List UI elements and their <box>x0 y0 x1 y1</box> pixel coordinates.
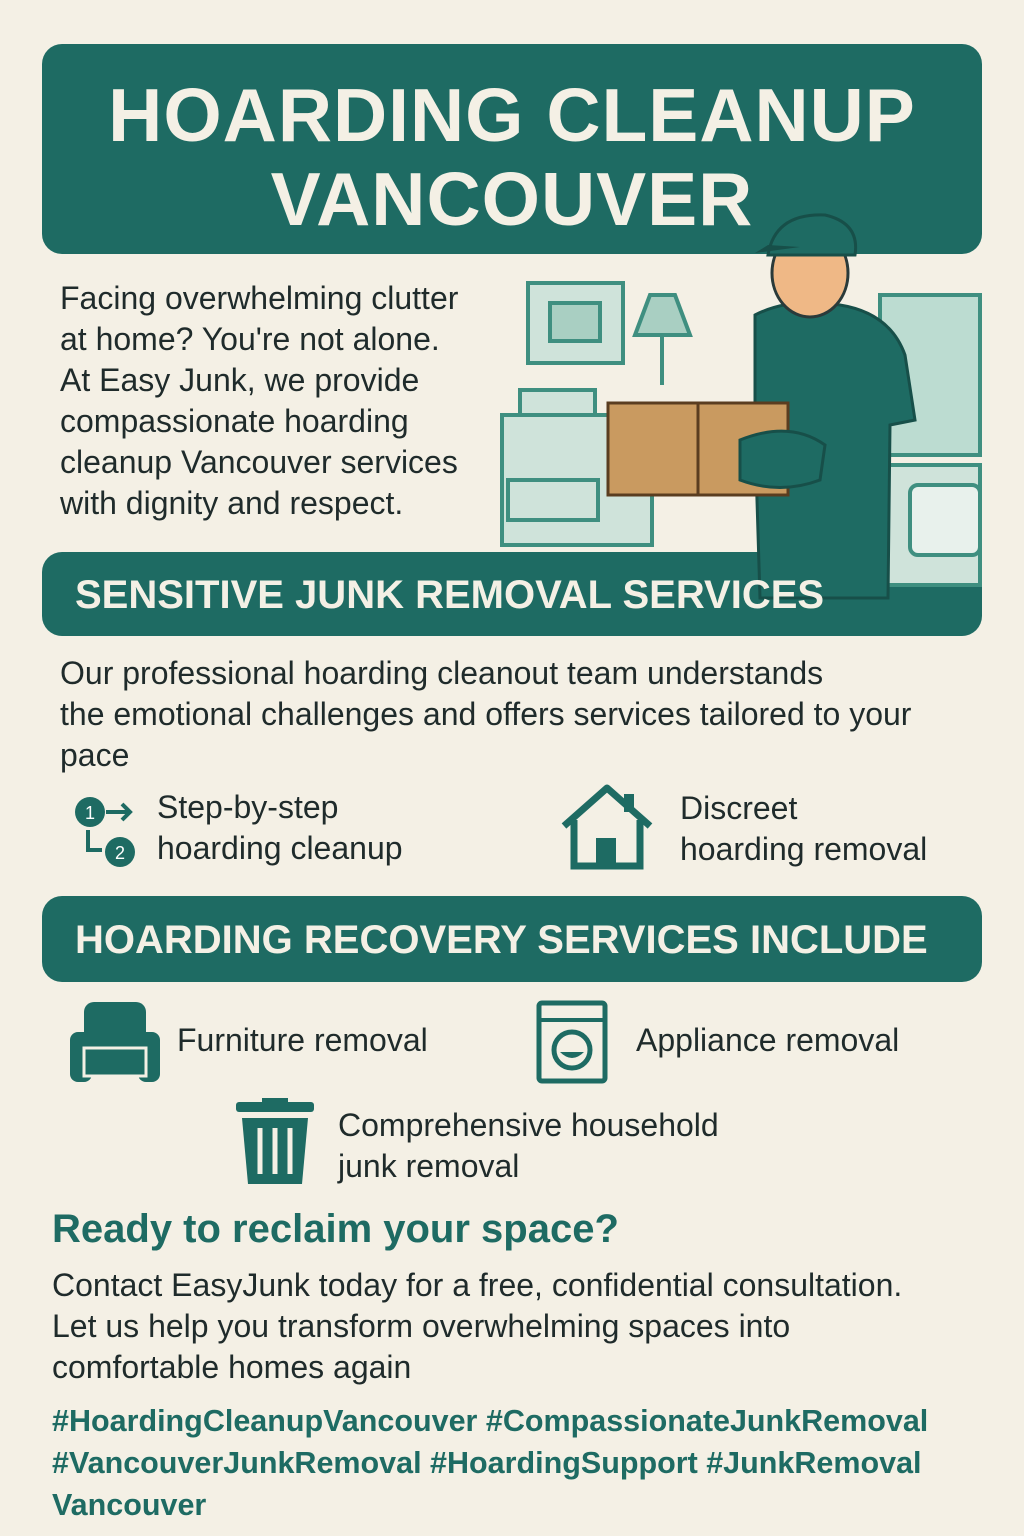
hashtags: Vancouver <box>52 1488 206 1522</box>
CTA text <box>52 1267 902 1385</box>
icon: steps <box>75 797 135 867</box>
intro text: with dignity and respect. <box>60 485 403 521</box>
paragraph <box>60 655 911 773</box>
CTA heading: Ready to reclaim your space? <box>52 1207 619 1251</box>
item: discreet removal: hoarding removal <box>680 831 927 867</box>
item: discreet removal: Discreet <box>680 790 797 826</box>
item: household junk: Comprehensive household <box>338 1107 719 1143</box>
intro text: Facing overwhelming clutter <box>60 280 458 316</box>
banner: sensitive junk removal: SENSITIVE JUNK REMOVAL SERVICES <box>75 573 824 617</box>
item: appliance: Appliance removal <box>636 1022 899 1058</box>
CTA text: Let us help you transform overwhelming spaces into <box>52 1308 790 1344</box>
item: household junk: junk removal <box>338 1148 519 1184</box>
item: furniture: Furniture removal <box>177 1022 428 1058</box>
icon: steps: 1 <box>85 803 95 823</box>
item: appliance <box>536 1000 899 1084</box>
intro text: at home? You're not alone. <box>60 321 440 357</box>
banner: recovery services: HOARDING RECOVERY SERVICES INCLUDE <box>75 918 928 962</box>
paragraph: the emotional challenges and offers services tailored to your <box>60 696 911 732</box>
banner: recovery services <box>42 896 982 982</box>
hashtags: #VancouverJunkRemoval #HoardingSupport #JunkRemoval <box>52 1446 922 1480</box>
title text: VANCOUVER <box>271 157 753 241</box>
item: step-by-step <box>75 789 403 867</box>
icon: house <box>562 784 652 870</box>
intro text <box>60 280 458 521</box>
title banner <box>42 44 982 254</box>
item: furniture <box>70 1002 428 1082</box>
intro text: At Easy Junk, we provide <box>60 362 419 398</box>
intro text: cleanup Vancouver services <box>60 444 458 480</box>
item: step-by-step: Step-by-step <box>157 789 338 825</box>
hashtags <box>52 1404 928 1522</box>
paragraph: pace <box>60 737 129 773</box>
paragraph: Our professional hoarding cleanout team understands <box>60 655 823 691</box>
banner: sensitive junk removal <box>42 552 982 636</box>
hashtags: #HoardingCleanupVancouver #CompassionateJunkRemoval <box>52 1404 928 1438</box>
item: household junk <box>236 1098 719 1184</box>
icon: trash can <box>236 1098 314 1184</box>
icon: armchair <box>70 1002 160 1082</box>
title text: HOARDING CLEANUP <box>108 73 916 157</box>
title text <box>108 73 916 241</box>
icon: steps: 2 <box>115 843 125 863</box>
CTA text: Contact EasyJunk today for a free, confidential consultation. <box>52 1267 902 1303</box>
icon: washing machine <box>536 1000 608 1084</box>
item: step-by-step: hoarding cleanup <box>157 830 403 866</box>
item: discreet removal <box>562 784 927 870</box>
illustration: worker with box <box>500 214 982 600</box>
intro text: compassionate hoarding <box>60 403 409 439</box>
CTA text: comfortable homes again <box>52 1349 411 1385</box>
